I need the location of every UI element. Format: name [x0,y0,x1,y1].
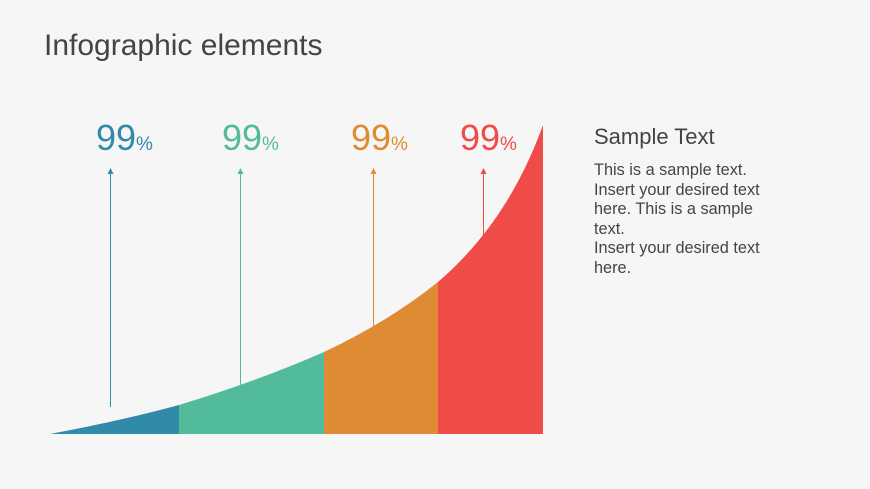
arrow: green [238,168,244,386]
band: orange [324,282,438,434]
body text: Insert your desired text here. [594,239,760,277]
body text: This is a sample text. [594,161,747,179]
band: blue [50,405,179,434]
heading: sample text: Sample Text [594,124,715,149]
band: red [438,125,543,434]
body text [594,161,760,277]
body text: Insert your desired text here. This is a sample text. [594,181,760,238]
band: green [179,352,324,434]
label: red 99%: 99% [460,117,517,158]
label: green 99%: 99% [222,117,279,158]
arrow: red [480,168,486,242]
arrow: blue [108,168,114,407]
label: blue 99%: 99% [96,117,153,158]
chart [50,124,543,434]
label: orange 99%: 99% [351,117,408,158]
title: Infographic elements [44,29,322,62]
arrow: orange [370,168,376,326]
